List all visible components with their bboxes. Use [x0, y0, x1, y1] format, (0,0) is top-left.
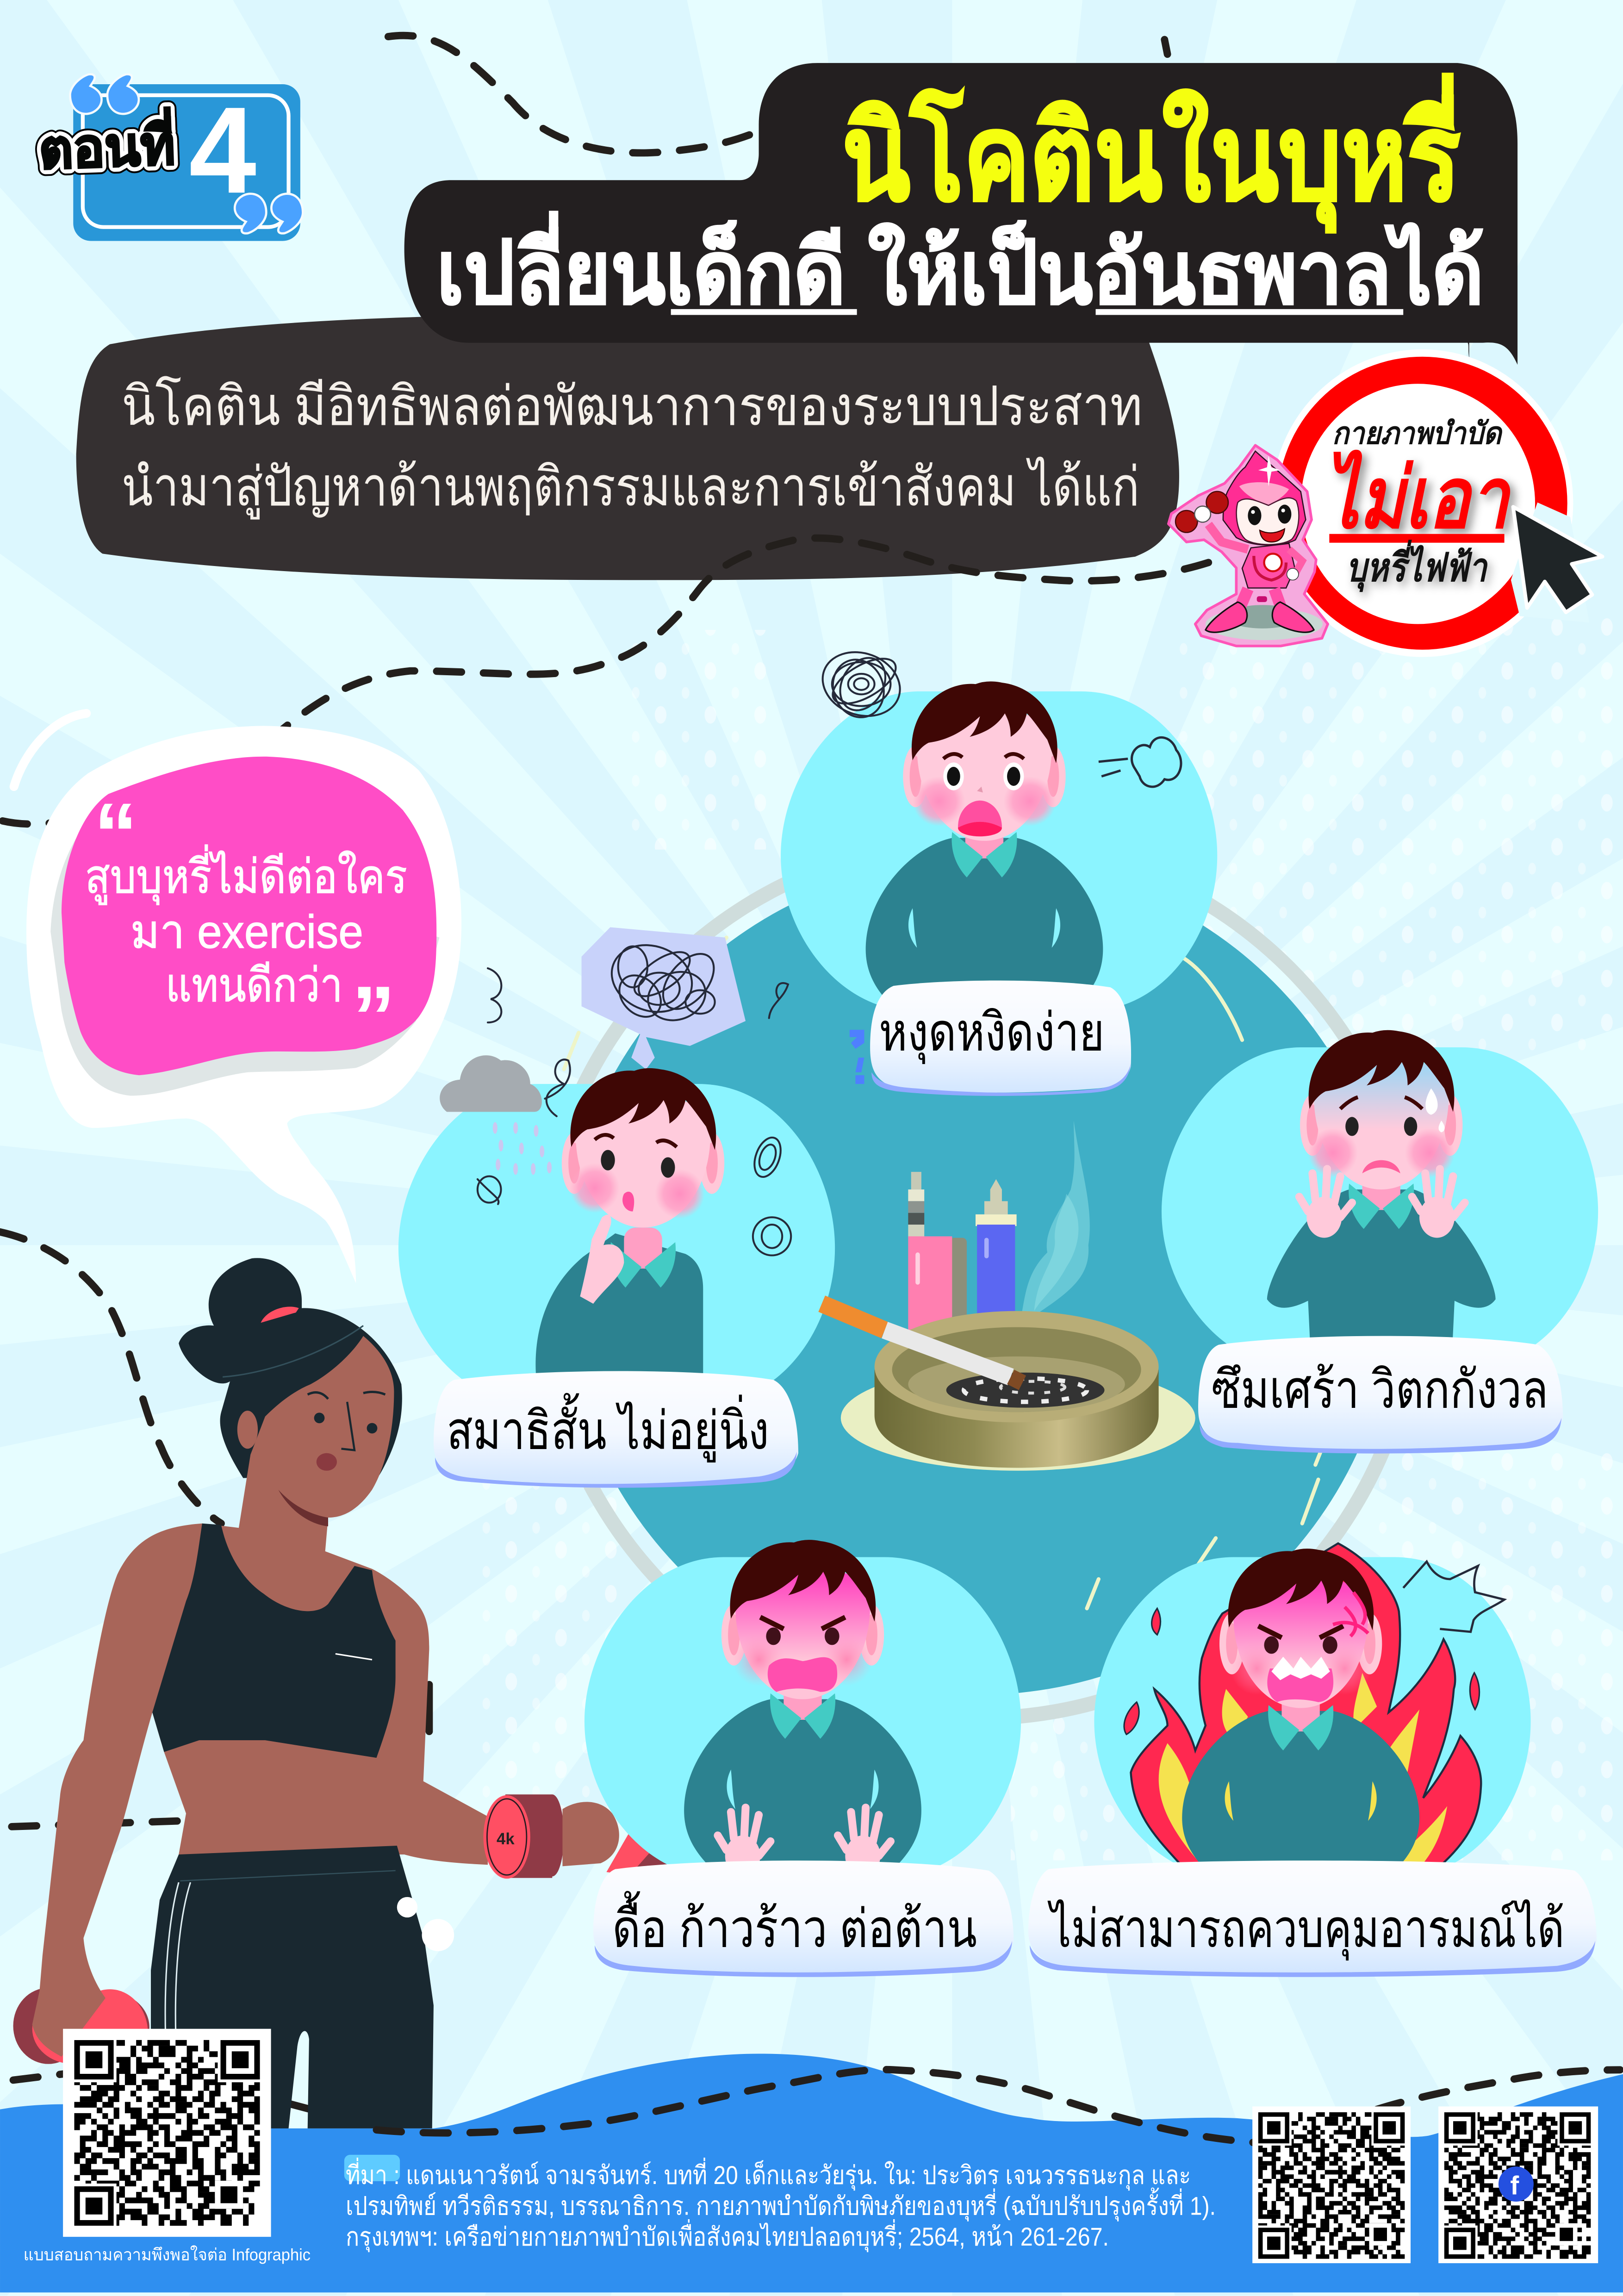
- label text: สมาธิสั้น ไม่อยู่นิ่ง: [447, 1393, 769, 1462]
- icon: question marks: [850, 1030, 864, 1084]
- hair back: [179, 1258, 402, 1478]
- label text: หงุดหงิดง่าย: [879, 1003, 1105, 1064]
- label: [870, 981, 1131, 1096]
- icon: flames: [1124, 1543, 1481, 1868]
- opening quote: “: [94, 785, 138, 883]
- subtitle line 2: นำมาสู่ปัญหาด้านพฤติกรรมและการเข้าสังคม ได้แก่: [122, 456, 1139, 520]
- icon: vape pink: [908, 1172, 967, 1339]
- title line 2: เปลี่ยนเด็กดี ให้เป็นอันธพาลได้: [436, 212, 1484, 322]
- label text: ซึมเศร้า วิตกกังวล: [1212, 1361, 1548, 1419]
- icon: puff: [1099, 737, 1181, 787]
- closing quote: ”: [352, 968, 396, 1066]
- icon: swirls: [478, 968, 791, 1256]
- logo: no e-cigarette sign: [1271, 349, 1603, 657]
- badge: episode 4: [37, 75, 302, 241]
- panel: central circle: [539, 840, 1418, 1718]
- panel: aggressive: [585, 1540, 1021, 1977]
- icon: thought bubble: [582, 927, 746, 1070]
- dashed line: left curve: [0, 1232, 221, 1524]
- mascot: [1169, 445, 1328, 646]
- icon: facebook: [1499, 2166, 1534, 2202]
- boy: head surprised: [903, 681, 1066, 841]
- arms and torso: [32, 1455, 488, 2057]
- text: episode: ตอนที่: [37, 107, 176, 180]
- subtitle panel: [76, 317, 1179, 580]
- woman with dumbbells: [13, 1258, 677, 2128]
- underline: good kid: [671, 309, 857, 315]
- quote marks top: [71, 75, 138, 113]
- icon: burst: [1403, 1562, 1505, 1632]
- title line 1: นิโคตินในบุหรี่: [842, 74, 1461, 233]
- boy: torso: [684, 1679, 921, 1872]
- qr code: survey: [63, 2029, 271, 2237]
- icon: hands: [1299, 1169, 1465, 1238]
- face: [250, 1336, 394, 1518]
- footer wave: [0, 2053, 1623, 2292]
- center: cigarette, vape and ashtray: [822, 1120, 1195, 1471]
- panel: right anxious: [1162, 1030, 1598, 1454]
- boy: torso: [535, 1227, 703, 1399]
- boy: head thinking: [562, 1068, 724, 1227]
- icon: hands: [718, 1808, 890, 1877]
- dashed line: footer right: [1377, 2070, 1620, 2109]
- icon: vape blue: [976, 1179, 1017, 1321]
- dashed line: across subtitle to bubble: [0, 538, 1208, 824]
- headband: [261, 1307, 299, 1323]
- logo text top: กายภาพบำบัด: [1332, 417, 1503, 451]
- boy: head angry: [721, 1540, 884, 1699]
- right dumbbell far end: [606, 1834, 677, 1878]
- logo underline: [1329, 534, 1505, 543]
- boy: torso: [1182, 1691, 1419, 1877]
- boy: head furious: [1219, 1549, 1382, 1708]
- dumbbell in right hand: [484, 1794, 564, 1879]
- boy: hand at chin: [580, 1214, 624, 1304]
- speech line 1: สูบบุหรี่ไม่ดีต่อใคร: [85, 845, 407, 905]
- white dots: [397, 1897, 417, 1917]
- numeral 4: 4: [189, 81, 257, 219]
- left dumbbell: [13, 1988, 149, 2077]
- quote marks bottom: [236, 195, 302, 232]
- speech bubble: [14, 713, 461, 1283]
- panel: irritable: [781, 641, 1217, 1096]
- panel: uncontrolled emotion: [1028, 1543, 1597, 1977]
- icon: rain cloud: [440, 1055, 552, 1175]
- icon: cigarette: [822, 1304, 1022, 1383]
- text: episode: ตอนที่: [37, 107, 176, 180]
- logo text bottom: บุหรี่ไฟฟ้า: [1346, 539, 1488, 592]
- right hand: [562, 1802, 619, 1866]
- label: [434, 1371, 798, 1488]
- dashed line: small top tick: [1164, 39, 1168, 54]
- source text: เปรมทิพย์ ทวีรติธรรม, บรรณาธิการ. กายภาพบำบัดกับพิษภัยของบุหรี่ (ฉบับปรับปรุงครั้งที่ 1).: [346, 2188, 1216, 2222]
- label text: ดื้อ ก้าวร้าว ต่อต้าน: [612, 1891, 977, 1958]
- dashed line: top: [388, 36, 765, 153]
- source text: กรุงเทพฯ: เครือข่ายกายภาพบำบัดเพื่อสังคมไทยปลอดบุหรี่; 2564, หน้า 261-267.: [346, 2219, 1109, 2252]
- dashed line: low left: [13, 2073, 311, 2109]
- title panel: [404, 63, 1517, 365]
- subtitle line 1: นิโคติน มีอิทธิพลต่อพัฒนาการของระบบประสาท: [122, 376, 1143, 436]
- logo text main: ไม่เอา: [1324, 449, 1511, 545]
- dashed line: mid left: [12, 1821, 183, 1827]
- text: episode: ตอนที่: [37, 107, 176, 180]
- speech line 2: มา exercise: [131, 906, 363, 958]
- source text: [344, 2155, 1216, 2252]
- label: [1028, 1860, 1597, 1977]
- icon: smoke: [1020, 1120, 1090, 1325]
- source text: ที่มา : แดนเนาวรัตน์ จามรจันทร์. บทที่ 20 เด็กและวัยรุ่น. ใน: ประวิตร เจนวรรธนะกุล และ: [346, 2158, 1191, 2191]
- icon: facebook: f: [1510, 2171, 1519, 2200]
- boy: torso: [866, 817, 1103, 1011]
- underline: delinquent: [1096, 309, 1403, 315]
- dashed line: over footer wave: [376, 2070, 1260, 2143]
- bra: [152, 1524, 396, 1758]
- source highlight: [344, 2155, 400, 2181]
- pants: [151, 1846, 434, 2128]
- caption: survey: แบบสอบถามความพึงพอใจต่อ Infographic: [24, 2245, 311, 2264]
- qr code: facebook: [1438, 2106, 1598, 2263]
- panel: left short attention: [398, 927, 835, 1488]
- dumbbell in right hand: 4k: [497, 1830, 515, 1848]
- icon: scribble: [814, 641, 909, 727]
- icon: cursor: [1513, 507, 1603, 612]
- speech line 3: แทนดีกว่า: [166, 959, 343, 1012]
- boy: head worried: [1300, 1030, 1462, 1189]
- label: [1198, 1336, 1563, 1454]
- icon: ashtray: [841, 1311, 1195, 1471]
- qr code: middle: [1252, 2106, 1411, 2263]
- label: [593, 1860, 1014, 1977]
- boy: torso: [1267, 1169, 1496, 1363]
- dashed line: behind arm: [428, 1685, 430, 1731]
